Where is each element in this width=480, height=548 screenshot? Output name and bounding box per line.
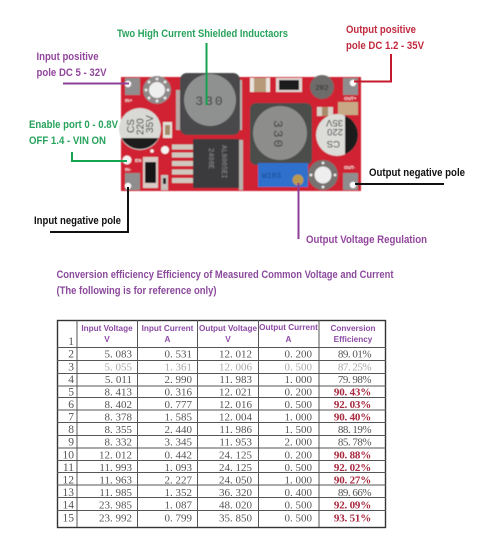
small inductor 2R2: 2R2 (315, 85, 329, 93)
heading: efficiency section title: Conversion efficiency Efficiency of Measured Common Voltage and Current (56, 269, 394, 281)
table header row: 1 (68, 336, 74, 348)
table data rows: 2. 440 (164, 424, 192, 436)
table data rows: 7 (68, 412, 74, 424)
heat tab strip (238, 80, 243, 190)
inductor left: 330 (195, 94, 225, 109)
table data rows: 0. 799 (164, 512, 192, 524)
arrow: enable port leader (72, 152, 127, 161)
table data rows: 5 (68, 386, 74, 398)
table data rows: 6 (68, 399, 74, 411)
table data rows: 1. 500 (284, 424, 312, 436)
small parts right (317, 102, 358, 116)
table data rows: 11 (63, 462, 74, 474)
table header row: Conversion (330, 324, 376, 333)
label: output positive: pole DC 1.2 - 35V (346, 40, 425, 52)
capacitor right (316, 114, 358, 156)
table data rows: 1. 000 (284, 374, 312, 386)
table data rows: 90. 27% (334, 474, 371, 486)
diode top (276, 78, 302, 92)
label: output positive (346, 24, 425, 52)
enable pad: EN (135, 158, 142, 163)
table data rows (62, 348, 371, 524)
capacitor right: 35V (325, 117, 343, 128)
pad: output positive: OUT+ (344, 96, 357, 101)
inductor left (180, 73, 240, 135)
table data rows: 5. 011 (105, 374, 132, 386)
mounting hole right (308, 160, 338, 190)
table header row: Input Current (142, 324, 194, 333)
table data rows: 12. 004 (219, 412, 252, 424)
inductor right (250, 103, 312, 165)
table data rows: 13 (62, 487, 74, 499)
capacitor right: 220 (327, 126, 343, 137)
label: input positive: pole DC 5 - 32V (36, 67, 107, 79)
label: enable port (29, 119, 119, 147)
table data rows: 93. 51% (334, 512, 371, 524)
table data rows: 0. 500 (284, 462, 312, 474)
table header row: Output Current (259, 323, 318, 332)
table data rows: 8. 378 (104, 412, 132, 424)
table data rows: 3 (68, 362, 74, 374)
table data rows: 1. 000 (284, 412, 312, 424)
table data rows: 10 (62, 450, 74, 462)
table data rows: 11. 963 (99, 474, 132, 486)
label: output voltage regulation: Output Voltage Regulation (306, 234, 427, 246)
table data rows: 0. 200 (284, 348, 312, 360)
label: enable port: OFF 1.4 - VIN ON (29, 135, 106, 147)
table data rows: 11. 986 (219, 424, 252, 436)
table data rows: 24. 050 (219, 474, 252, 486)
heading: efficiency section title: (The following is for reference only) (56, 285, 217, 297)
small resistor (161, 175, 168, 190)
capacitor left: 35V (145, 115, 156, 133)
table data rows: 79. 98% (338, 374, 371, 386)
table data rows: 12. 012 (99, 450, 132, 462)
table data rows: 8 (68, 424, 74, 436)
IC pins (172, 144, 193, 183)
inductor right: 330 (270, 120, 285, 149)
table data rows: 0. 500 (284, 362, 312, 374)
table data rows: 24. 125 (219, 450, 252, 462)
pad: input negative (125, 173, 140, 190)
table data rows: 90. 40% (334, 412, 371, 424)
table data rows: 12. 016 (219, 399, 252, 411)
pad: output negative: OUT- (344, 165, 355, 170)
table header row: V (104, 335, 110, 344)
table data rows: 15 (62, 512, 74, 524)
table data rows: 1. 000 (284, 474, 312, 486)
table data rows: 0. 200 (284, 386, 312, 398)
small inductor 2R2 (310, 75, 334, 99)
label: enable port: Enable port 0 - 0.8V (29, 119, 119, 131)
table data rows: 0. 442 (164, 450, 192, 462)
mounting hole left (143, 76, 171, 104)
table header row: Efficiency (334, 335, 373, 344)
table data rows: 11. 985 (99, 487, 132, 499)
table data rows: 1. 361 (164, 362, 192, 374)
IC regulator chip: AL8005EI (219, 145, 227, 179)
table data rows: 1. 087 (164, 500, 192, 512)
pad: output negative (343, 165, 358, 190)
table data rows: 0. 200 (284, 450, 312, 462)
enable pad: IN- (125, 167, 132, 172)
table data rows: 36. 320 (219, 487, 252, 499)
IC regulator chip: 2408E (206, 148, 214, 169)
pad: output positive (343, 78, 358, 101)
table header row: A (165, 335, 171, 344)
table data rows: 9 (68, 436, 74, 448)
table header row: Output Voltage (199, 324, 257, 333)
table data rows: 12. 012 (219, 348, 252, 360)
table: measured conversion efficiency (57, 320, 386, 528)
table data rows: 0. 400 (284, 487, 312, 499)
table data rows: 92. 09% (334, 500, 371, 512)
IC regulator chip (193, 139, 239, 188)
table data rows: 90. 88% (334, 450, 371, 462)
table header row: V (225, 335, 231, 344)
label: output positive: Output positive (346, 24, 416, 36)
table data rows: 12. 006 (219, 362, 252, 374)
table data rows: 1. 352 (164, 487, 192, 499)
table data rows: 2. 990 (164, 374, 192, 386)
label: input positive: Input positive (36, 51, 98, 63)
trimmer potentiometer (258, 163, 308, 187)
grey metal strip beside inductor (176, 90, 182, 130)
table data rows: 8. 413 (104, 386, 132, 398)
table data rows: 0. 500 (284, 512, 312, 524)
table data rows: 2. 227 (164, 474, 192, 486)
table data rows: 11. 983 (219, 374, 252, 386)
table data rows: 14 (62, 500, 74, 512)
panel: converter circuit board (119, 73, 361, 191)
table data rows: 0. 500 (284, 500, 312, 512)
arrow: inductor leader (206, 43, 208, 105)
table data rows: 88. 19% (338, 424, 371, 436)
table data rows: 1. 093 (164, 462, 192, 474)
table data rows: 35. 850 (219, 512, 252, 524)
arrow: input negative leader (50, 187, 128, 232)
pad: input positive (125, 78, 140, 103)
table data rows: 92. 03% (334, 399, 371, 411)
table data rows: 23. 992 (99, 512, 132, 524)
capacitor tan top (250, 78, 270, 92)
table data rows: 87. 25% (338, 362, 371, 374)
table data rows: 2. 000 (284, 436, 312, 448)
table data rows: 12. 021 (219, 386, 252, 398)
trimmer potentiometer: W103 (262, 172, 281, 181)
heading: inductors label: Two High Current Shielded Inductaors (117, 28, 288, 40)
table data rows: 12 (62, 474, 74, 486)
label: input positive (36, 51, 107, 79)
table grid (57, 320, 386, 528)
table data rows: 11. 993 (99, 462, 132, 474)
table data rows: 5. 083 (104, 348, 132, 360)
arrow: output positive leader (354, 54, 391, 82)
table data rows: 5. 055 (104, 362, 132, 374)
table data rows: 4 (68, 374, 74, 386)
enable pad (122, 156, 142, 172)
table data rows: 0. 777 (164, 399, 192, 411)
table data rows: 0. 500 (284, 399, 312, 411)
table data rows: 24. 125 (219, 462, 252, 474)
table data rows: 92. 02% (334, 462, 371, 474)
table data rows: 8. 402 (104, 399, 132, 411)
arrow: output negative leader (355, 183, 444, 185)
table data rows: 90. 43% (334, 386, 371, 398)
table header row: A (286, 335, 292, 344)
table data rows: 89. 66% (338, 487, 371, 499)
capacitor left: 220 (136, 118, 146, 135)
capacitor right: CS (327, 138, 340, 149)
table header row: Input Voltage (81, 324, 133, 333)
white test points (150, 146, 169, 154)
diode SMA (143, 157, 158, 188)
table data rows: 11. 953 (219, 436, 252, 448)
small capacitor (163, 122, 172, 138)
table data rows: 8. 332 (104, 436, 132, 448)
table data rows: 48. 020 (219, 500, 252, 512)
arrow: input positive leader (63, 82, 129, 84)
table header row (68, 323, 376, 348)
table data rows: 0. 316 (164, 386, 192, 398)
capacitor left: CS (126, 119, 137, 133)
label: output negative: Output negative pole (369, 167, 465, 179)
table data rows: 3. 345 (164, 436, 192, 448)
table data rows: 85. 78% (338, 436, 371, 448)
table data rows: 8. 355 (104, 424, 132, 436)
heading: efficiency section title (56, 269, 394, 297)
table data rows: 89. 01% (338, 348, 371, 360)
arrow: voltage regulation leader (298, 183, 300, 239)
table data rows: 0. 531 (164, 348, 192, 360)
label: input negative: Input negative pole (34, 215, 121, 227)
board substrate (121, 77, 361, 191)
table data rows: 23. 985 (99, 500, 132, 512)
pad: input positive: IN+ (125, 98, 133, 103)
table data rows: 1. 585 (164, 412, 192, 424)
capacitor left (119, 108, 161, 150)
table data rows: 2 (68, 348, 74, 360)
